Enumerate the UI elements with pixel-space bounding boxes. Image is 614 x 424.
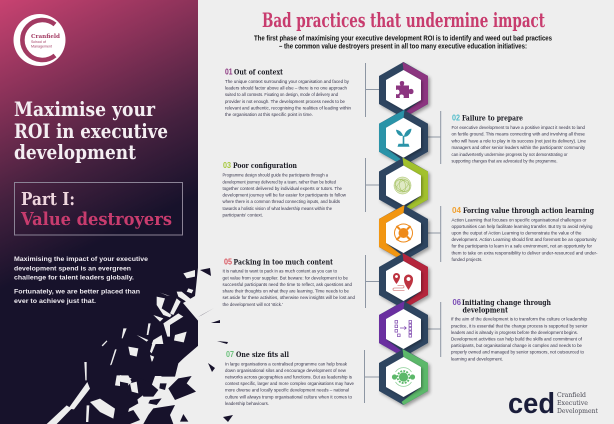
logo: Cranfield Executive Development: Executive xyxy=(557,400,588,407)
part label box: Value destroyers xyxy=(20,209,172,230)
subheading: The first phase of maximising your executive development ROI is to identify and weed out bad practices xyxy=(254,33,552,42)
section 02: failure to prepare: managers and other senior leaders within the participants' community xyxy=(452,145,586,151)
section 03: poor configuration: Poor configuration xyxy=(233,161,298,170)
sidebar title xyxy=(14,97,168,164)
sidebar title: Maximise your xyxy=(14,97,155,121)
section 02: failure to prepare: can inadvertently undermine progress by not demonstrating or xyxy=(452,152,568,158)
logo: Cranfield Executive Development xyxy=(508,388,599,420)
shattered glass fragments xyxy=(47,258,200,424)
hexagon 4: lifebuoy icon xyxy=(379,205,428,261)
section 02: failure to prepare: 02 xyxy=(452,114,460,122)
section 05: packing in too much content: get value from your supplier. But beware: for development to be xyxy=(222,275,348,281)
section 07: one size fits all: 07 xyxy=(226,350,234,359)
section 01: out of context: the organisation at this specific point in time. xyxy=(225,112,313,118)
sidebar intro text xyxy=(14,256,148,305)
section 01: out of context: provider is not enough. The development process needs to be xyxy=(225,99,345,105)
section 01: out of context: 01 xyxy=(225,67,233,76)
logo: Cranfield Executive Development: Cranfield xyxy=(557,392,586,399)
hexagon 7: gear icon xyxy=(379,349,428,405)
section 02: failure to prepare: supporting changes that are advocated by the programme. xyxy=(452,158,558,164)
section 03: poor configuration: development journey delivered by a team, rather than be bolted xyxy=(222,179,336,185)
section 06: initiating change through development: leaders and is already in progress before the development begins. xyxy=(451,330,578,336)
section 04: forcing value through action learning xyxy=(452,206,598,263)
section 06: initiating change through development: If the aim of the development is to transform the culture or leadership xyxy=(451,317,587,323)
hexagon 1: puzzle icon xyxy=(379,62,428,118)
logo: Cranfield Executive Development: ced xyxy=(508,388,555,420)
section 02: failure to prepare: on fertile ground. This means connecting with and involving all those xyxy=(452,132,585,138)
section 06: initiating change through development: 06 xyxy=(452,298,462,307)
sidebar intro text: Fortunately, we are better placed than xyxy=(14,288,140,296)
section 05: packing in too much content: It is natural to want to pack in as much content as you can to xyxy=(222,269,337,275)
section 01: out of context: suited to all contexts. Fixating on design, mode of delivery and xyxy=(225,92,338,98)
section 04: forcing value through action learning: opportunities can help facilitate learning transfer. But try to avoid relying xyxy=(452,224,593,230)
dark shards on light background xyxy=(198,268,233,422)
part label box xyxy=(14,182,182,235)
section 03: poor configuration: Programme design should guide the participants through a xyxy=(222,173,328,179)
section 01: out of context: leaders should factor above all else – there is no one approach xyxy=(225,86,347,92)
hexagon 3: scribble icon xyxy=(379,158,428,214)
section 04: forcing value through action learning: upon the output of Action Learning to demonstrate the value of the xyxy=(452,230,582,236)
hexagon 6: process flow icon xyxy=(379,301,428,357)
section 04: forcing value through action learning: development. Action Learning should first and foremost be an opportunity xyxy=(452,237,597,243)
part label box: Part I: xyxy=(21,189,75,210)
section 05: packing in too much content: successful participants need the time to reflect, ask questions and xyxy=(222,282,352,288)
section 01: out of context: relevant and authentic, recognising the realities of leading within xyxy=(225,105,351,111)
section 02: failure to prepare xyxy=(452,114,586,164)
section 02: failure to prepare: For executive development to have a positive impact it needs to land xyxy=(452,125,585,131)
section 06: initiating change through development: learning and development. xyxy=(451,356,503,362)
section 07: one size fits all: culture will always trump organisational culture when it comes to xyxy=(225,394,352,400)
section 05: packing in too much content: the development will not 'stick.' xyxy=(222,302,283,308)
section 03: poor configuration: development journey will be far easier for participants to follow xyxy=(222,193,346,199)
sidebar intro text: Maximising the impact of your executive xyxy=(14,256,148,263)
logo: Cranfield Executive Development: Development xyxy=(557,408,599,415)
section 02: failure to prepare: who will have a role to play in its success (not just its delivery). Line xyxy=(452,138,586,144)
section 06: initiating change through development xyxy=(451,298,588,362)
subheading xyxy=(254,33,552,50)
section 06: initiating change through development: practice, it is essential that the change process is supported by senior xyxy=(451,323,588,329)
section 03: poor configuration: towards a holistic vision of what leadership means within the xyxy=(222,206,332,212)
hexagon 5: map pins icon xyxy=(379,253,428,309)
section 04: forcing value through action learning: 04 xyxy=(452,206,462,215)
sidebar title: development xyxy=(14,140,137,164)
section 04: forcing value through action learning: Action Learning that focuses on specific organisational challenges or xyxy=(452,217,587,223)
sidebar intro text: development spend is an evergreen xyxy=(14,265,131,272)
section 03: poor configuration: where there is a common thread connecting inputs, and builds xyxy=(222,199,341,205)
section 07: one size fits all: leadership behaviours. xyxy=(225,401,269,407)
section 05: packing in too much content: set aside for these activities, otherwise new insights will be lost and xyxy=(222,295,355,301)
section 07: one size fits all: down organisational silos and encourage development of new xyxy=(225,368,346,374)
section 06: initiating change through development: Development activities can help build the skills and commitment of xyxy=(451,336,583,342)
section 05: packing in too much content: 05 xyxy=(224,257,232,266)
section 05: packing in too much content: share their thoughts on what they are learning. Time needs to be xyxy=(222,289,349,295)
section 07: one size fits all: networks across geographies and functions. But as leadership is xyxy=(225,374,353,380)
section 07: one size fits all: In large organisations a centralised programme can help break xyxy=(225,361,348,367)
section 04: forcing value through action learning: funded projects. xyxy=(452,257,482,263)
section 06: initiating change through development: development xyxy=(462,306,509,315)
logo: Cranfield School of Management xyxy=(14,14,66,66)
section 01: out of context: The unique context surrounding your organisation and faced by xyxy=(225,79,350,85)
sidebar intro text: challenge for talent leaders globally. xyxy=(14,275,134,282)
logo: Cranfield School of Management: School of xyxy=(31,40,46,44)
logo: Cranfield School of Management: Cranfield xyxy=(31,34,60,40)
section 01: out of context: Out of context xyxy=(234,67,284,76)
section 04: forcing value through action learning: for the participants to learn in a safe environment, not an opportunity for xyxy=(452,244,592,250)
hexagon chain xyxy=(379,62,428,405)
section 07: one size fits all: context specific, larger and more complex organisations may have xyxy=(225,381,354,387)
section 06: initiating change through development: participants, but organisational change is complex and needs to be xyxy=(451,343,582,349)
section 02: failure to prepare: Failure to prepare xyxy=(462,114,523,122)
section 07: one size fits all: more diverse and locally specific development needs – national xyxy=(225,388,349,394)
section 01: out of context xyxy=(225,67,351,118)
section 07: one size fits all: One size fits all xyxy=(236,350,289,359)
panel: left sidebar xyxy=(0,0,200,424)
section 05: packing in too much content xyxy=(222,257,355,308)
sidebar title: ROI in executive xyxy=(14,119,168,143)
logo: Cranfield School of Management: Management xyxy=(31,44,52,48)
section 06: initiating change through development: properly owned and managed by senior sponsors, not outsourced to xyxy=(451,350,584,356)
connector lines xyxy=(364,63,441,403)
hexagon 2: sprout icon xyxy=(379,110,428,166)
sidebar intro text: ever to achieve just that. xyxy=(14,298,96,305)
section 03: poor configuration xyxy=(222,161,346,218)
section 05: packing in too much content: Packing in too much content xyxy=(234,257,334,266)
subheading: – the common value destroyers present in all too many executive education initiatives: xyxy=(279,42,527,50)
section 04: forcing value through action learning: Forcing value through action learning xyxy=(463,206,594,215)
section 04: forcing value through action learning: them to take on extra responsibility to deliver under-resourced and under- xyxy=(452,250,598,256)
section 03: poor configuration: participants' context. xyxy=(222,212,263,218)
section 03: poor configuration: 03 xyxy=(223,161,231,170)
section 07: one size fits all xyxy=(225,350,354,407)
section 06: initiating change through development: Initiating change through xyxy=(462,298,552,307)
section 03: poor configuration: together content delivered by individual experts or tutors. The xyxy=(222,186,342,192)
